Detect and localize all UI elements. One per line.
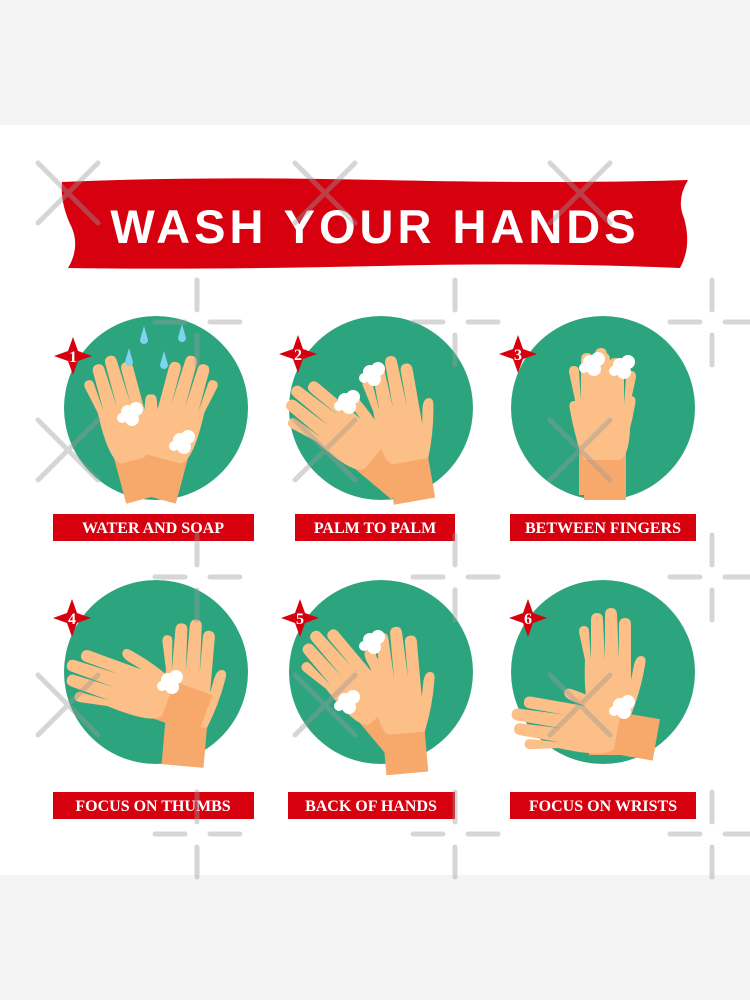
step 5: [281, 580, 473, 776]
label 2: PALM TO PALM: [314, 520, 436, 537]
step 1: [54, 316, 248, 506]
label 5: [288, 792, 455, 819]
label 4: FOCUS ON THUMBS: [75, 798, 231, 815]
label 5: BACK OF HANDS: [305, 798, 437, 815]
title banner: WASH YOUR HANDS: [110, 200, 640, 253]
step 4: 4: [68, 611, 76, 628]
label 4: [53, 792, 254, 819]
step 4: [53, 580, 248, 769]
step 2: 2: [294, 347, 302, 364]
step 6: [506, 580, 695, 771]
step 5: 5: [296, 611, 304, 628]
label 6: FOCUS ON WRISTS: [529, 798, 677, 815]
label 2: [295, 514, 455, 541]
label 1: [53, 514, 254, 541]
step 1: 1: [69, 349, 77, 366]
label 6: [510, 792, 696, 819]
label 1: WATER AND SOAP: [82, 520, 224, 537]
step 3: 3: [514, 347, 522, 364]
step 3: [499, 316, 695, 500]
label 3: BETWEEN FINGERS: [525, 520, 681, 537]
step 6: 6: [524, 611, 532, 628]
title banner: [62, 178, 688, 269]
step 2: [272, 316, 473, 507]
label 3: [510, 514, 696, 541]
